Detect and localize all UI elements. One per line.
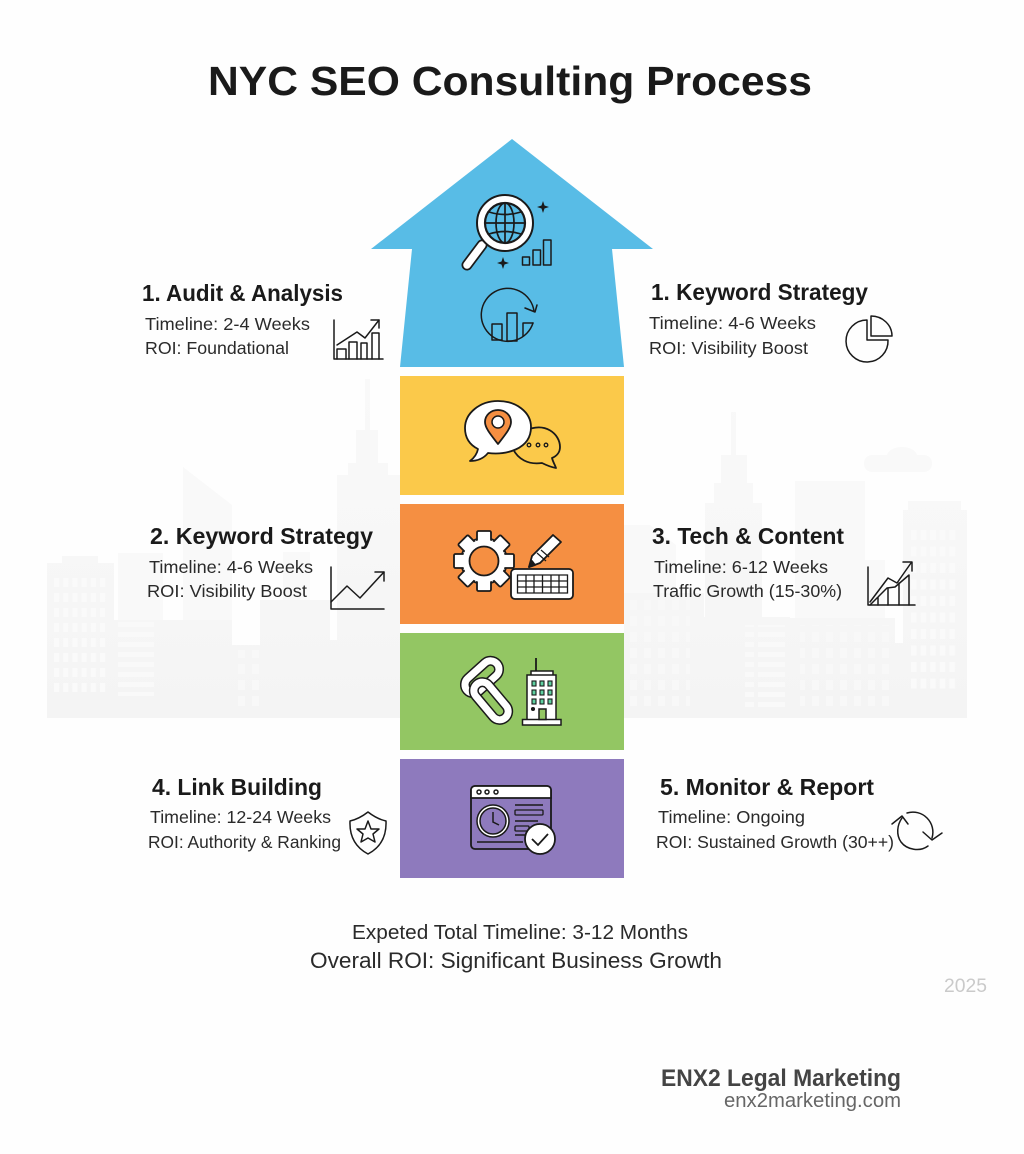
icon: growth chart: [868, 562, 915, 605]
icon: pie chart: [846, 316, 892, 362]
text block: step 2 keyword strategy: Timeline: 4-6 Weeks: [149, 557, 313, 577]
text block: step 3 tech and content: Traffic Growth (15-30%): [653, 581, 842, 601]
text block: step 1 audit and analysis: 1. Audit & Analysis: [142, 280, 343, 306]
panel: yellow segment: [400, 376, 624, 495]
title: NYC SEO Consulting Process: [208, 58, 812, 104]
text block: step 4 link building: ROI: Authority & Ranking: [148, 832, 341, 852]
icon: office building: [522, 658, 561, 725]
summary: total timeline: Expeted Total Timeline: 3-12 Months: [352, 922, 688, 944]
icon: bar chart with rising arrow: [334, 320, 383, 359]
text block: step 1 audit and analysis: Timeline: 2-4 Weeks: [145, 314, 310, 334]
text block: step 1 keyword strategy: Timeline: 4-6 Weeks: [649, 313, 816, 333]
icon: chain links: [461, 657, 512, 723]
text block: step 2 keyword strategy: ROI: Visibility Boost: [147, 581, 307, 601]
text block: step 4 link building: Timeline: 12-24 Weeks: [150, 807, 331, 827]
panel: orange segment: [400, 504, 624, 624]
icon: circular bar chart: [481, 288, 537, 341]
icon: browser window with clock and check: [471, 786, 555, 854]
text block: step 1 keyword strategy: ROI: Visibility Boost: [649, 338, 808, 358]
text block: step 1 keyword strategy: 1. Keyword Strategy: [651, 279, 868, 305]
summary: overall ROI: Overall ROI: Significant Business Growth: [310, 948, 722, 973]
text block: step 2 keyword strategy: 2. Keyword Strategy: [150, 523, 373, 549]
text block: step 5 monitor and report: [656, 774, 894, 852]
text block: step 3 tech and content: Timeline: 6-12 Weeks: [654, 557, 828, 577]
text block: step 5 monitor and report: 5. Monitor & Report: [660, 774, 874, 800]
text block: step 5 monitor and report: ROI: Sustained Growth (30++): [656, 832, 894, 852]
text block: step 3 tech and content: [652, 523, 844, 601]
panel: purple segment: [400, 759, 624, 878]
icon: gear with pencil and keyboard: [454, 531, 573, 599]
background: city skyline: [47, 379, 967, 718]
text block: step 1 keyword strategy: [649, 279, 868, 358]
text block: step 3 tech and content: 3. Tech & Content: [652, 523, 844, 549]
icon: refresh arrows: [892, 812, 942, 849]
panel: green segment: [400, 633, 624, 750]
icon: chat bubbles with location pin: [465, 401, 560, 468]
text block: step 1 audit and analysis: [142, 280, 343, 358]
text block: step 5 monitor and report: Timeline: Ongoing: [658, 807, 805, 827]
brand url: enx2marketing.com: [724, 1090, 901, 1112]
text block: step 4 link building: 4. Link Building: [152, 774, 322, 800]
year label: 2025: [944, 976, 987, 997]
icon: shield with star: [350, 812, 386, 854]
panel: blue arrow top segment: [371, 139, 653, 367]
text block: step 1 audit and analysis: ROI: Foundational: [145, 338, 289, 358]
text block: step 2 keyword strategy: [147, 523, 373, 601]
text block: step 4 link building: [148, 774, 341, 852]
icon: magnifying glass over globe: [467, 195, 551, 269]
brand name: ENX2 Legal Marketing: [661, 1065, 901, 1092]
icon: line chart: [331, 567, 384, 609]
